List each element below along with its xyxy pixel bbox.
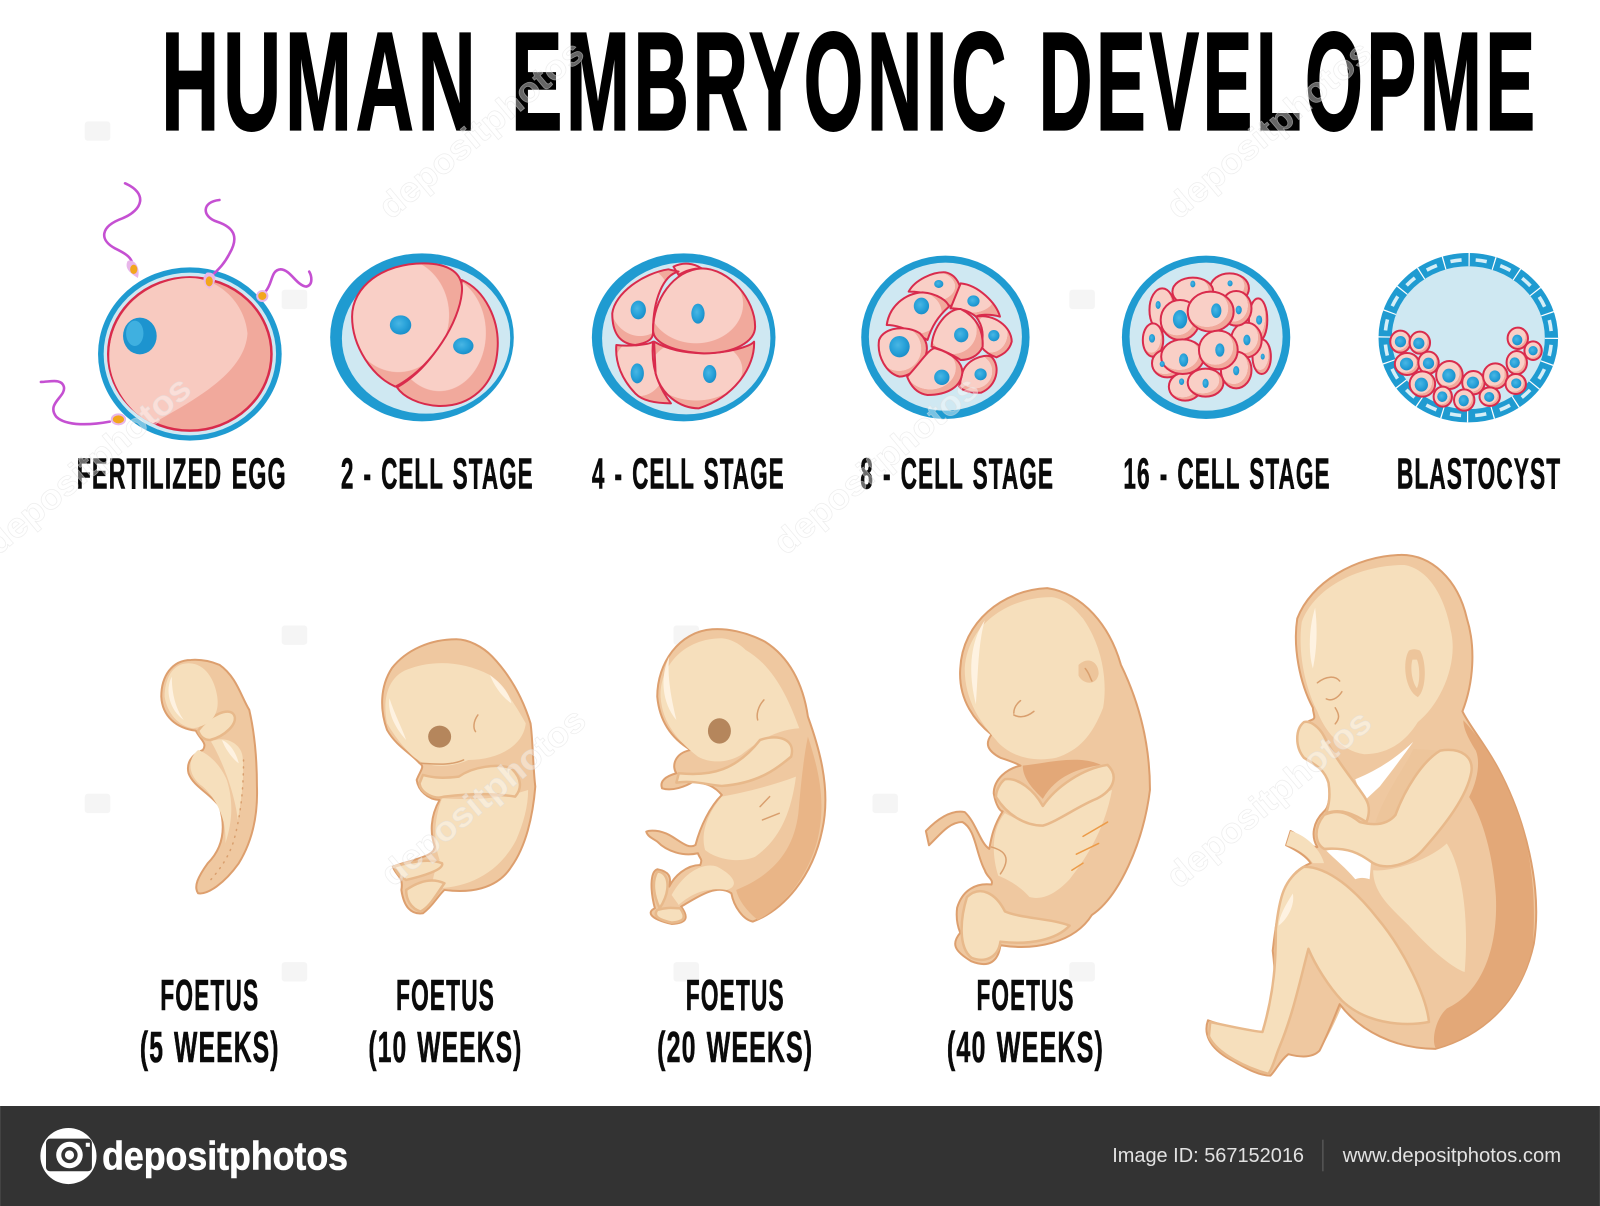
label: foetus 10 weeks: (10 WEEKS) bbox=[368, 1023, 522, 1072]
label: foetus 40 weeks: FOETUS bbox=[977, 971, 1074, 1020]
watermarks: depositphotos bbox=[766, 369, 986, 562]
stage: 8-cell bbox=[861, 256, 1030, 419]
foetus: 10 weeks bbox=[382, 639, 535, 913]
back leg bbox=[1288, 979, 1344, 1057]
label: foetus 10 weeks bbox=[368, 971, 522, 1072]
label: foetus 20 weeks: FOETUS bbox=[686, 971, 785, 1020]
sperm: lower left bbox=[41, 381, 125, 424]
foetus: 40 weeks bbox=[926, 588, 1150, 964]
label: foetus 40 weeks bbox=[947, 971, 1104, 1072]
watermarks: depositphotos bbox=[1159, 703, 1379, 896]
stage: fertilized egg bbox=[41, 183, 311, 441]
icon: camera logo bbox=[40, 1128, 96, 1184]
label: foetus 10 weeks: FOETUS bbox=[396, 971, 495, 1020]
logo wordmark: depositphotos bbox=[102, 1134, 348, 1178]
foetus: 20 weeks bbox=[646, 629, 825, 924]
label: 8-cell: 8 - CELL STAGE bbox=[860, 450, 1054, 499]
footer bar bbox=[0, 1106, 1600, 1206]
title: HUMAN bbox=[161, 3, 480, 160]
watermarks: depositphotos bbox=[1159, 33, 1379, 227]
watermark camera icons bbox=[85, 121, 1488, 982]
watermarks: depositphotos bbox=[372, 33, 591, 227]
foetus: full term baby bbox=[1206, 555, 1536, 1076]
stage: 16-cell bbox=[1122, 256, 1290, 419]
website url: www.depositphotos.com bbox=[1342, 1145, 1561, 1167]
image id: Image ID: 567152016 bbox=[1112, 1145, 1304, 1167]
sperm: top centre bbox=[204, 200, 234, 289]
foetus: 5 weeks bbox=[161, 660, 257, 893]
label: foetus 40 weeks: (40 WEEKS) bbox=[947, 1023, 1104, 1072]
label: foetus 5 weeks: FOETUS bbox=[160, 971, 259, 1020]
label: foetus 5 weeks bbox=[140, 971, 280, 1072]
label: 2-cell: 2 - CELL STAGE bbox=[341, 450, 534, 499]
watermarks bbox=[0, 33, 1379, 896]
stage: 4-cell bbox=[592, 253, 776, 421]
sperm: top left bbox=[104, 183, 140, 278]
label: foetus 20 weeks bbox=[657, 971, 813, 1072]
watermarks: depositphotos bbox=[374, 701, 593, 894]
label: fertilized egg: FERTILIZED EGG bbox=[77, 450, 287, 499]
stage: blastocyst bbox=[1379, 253, 1558, 422]
label: 16-cell: 16 - CELL STAGE bbox=[1123, 450, 1331, 499]
stage: 2-cell bbox=[330, 253, 514, 421]
title bbox=[161, 3, 1539, 160]
sperm: right bbox=[257, 269, 311, 301]
title: EMBRYONIC bbox=[511, 3, 1010, 160]
label: foetus 5 weeks: (5 WEEKS) bbox=[140, 1023, 280, 1072]
label: 4-cell: 4 - CELL STAGE bbox=[592, 450, 785, 499]
label: foetus 20 weeks: (20 WEEKS) bbox=[657, 1023, 813, 1072]
